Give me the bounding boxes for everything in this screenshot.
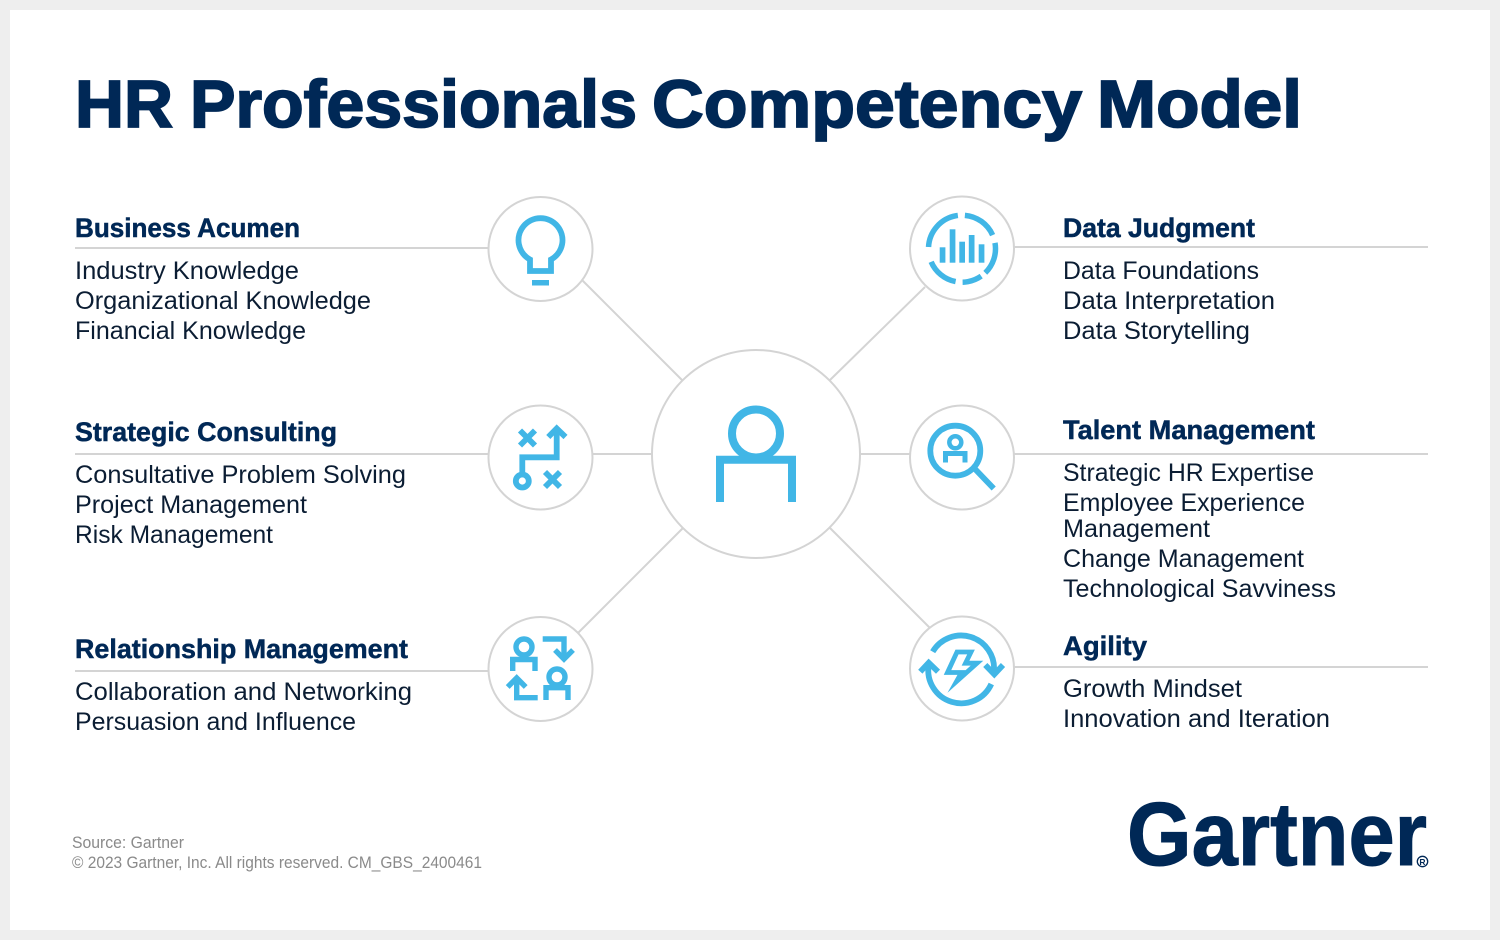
- list: strategic consulting skills: Project Management: [75, 491, 307, 519]
- source note: © 2023 Gartner, Inc. All rights reserved. CM_GBS_2400461: [72, 854, 482, 872]
- list: agility skills: [1063, 675, 1330, 733]
- panel: data judgment: [1063, 213, 1275, 345]
- list: relationship management skills: Collaboration and Networking: [75, 678, 412, 706]
- logo: Gartner: Gartner: [1127, 785, 1427, 885]
- source note: [72, 834, 482, 872]
- list: talent management skills: Strategic HR Expertise: [1063, 459, 1314, 487]
- heading: agility: Agility: [1063, 631, 1147, 661]
- list: talent management skills: Employee Experience: [1063, 489, 1305, 517]
- list: relationship management skills: Persuasion and Influence: [75, 708, 356, 736]
- icon: relationship exchange: [488, 617, 592, 721]
- list: relationship management skills: [75, 678, 412, 736]
- heading: relationship management: Relationship Management: [75, 634, 408, 664]
- icon: agility cycle: [910, 616, 1014, 720]
- list: data judgment skills: [1063, 257, 1275, 345]
- icon: strategy path: [488, 406, 592, 510]
- list: business acumen skills: Industry Knowledge: [75, 257, 299, 285]
- list: talent management skills: Change Management: [1063, 545, 1304, 573]
- heading: strategic consulting: Strategic Consulting: [75, 417, 337, 447]
- list: strategic consulting skills: Consultative Problem Solving: [75, 461, 406, 489]
- panel: talent management: [1063, 415, 1336, 603]
- icon: central person: [652, 350, 860, 558]
- title: Competency: [652, 67, 1082, 142]
- list: business acumen skills: Financial Knowledge: [75, 317, 306, 345]
- heading: business acumen: Business Acumen: [75, 213, 300, 243]
- heading: data judgment: Data Judgment: [1063, 213, 1255, 243]
- icon: light bulb: [488, 197, 592, 301]
- list: data judgment skills: Data Interpretation: [1063, 287, 1275, 315]
- list: data judgment skills: Data Storytelling: [1063, 317, 1250, 345]
- heading: talent management: Talent Management: [1063, 415, 1315, 445]
- list: business acumen skills: [75, 257, 371, 345]
- list: talent management skills: [1063, 459, 1336, 603]
- list: strategic consulting skills: Risk Management: [75, 521, 273, 549]
- panel: strategic consulting: [75, 417, 406, 549]
- icon: data chart ring: [910, 196, 1014, 300]
- source note: Source: Gartner: [72, 834, 184, 852]
- logo: Gartner: R: [1419, 857, 1426, 867]
- list: data judgment skills: Data Foundations: [1063, 257, 1259, 285]
- list: talent management skills: Technological Savviness: [1063, 575, 1336, 603]
- title: HR: [75, 67, 173, 142]
- title: Model: [1097, 67, 1302, 142]
- panel: agility: [1063, 631, 1330, 733]
- title: [75, 67, 1302, 142]
- icon: talent magnifier: [910, 406, 1014, 510]
- list: agility skills: Innovation and Iteration: [1063, 705, 1330, 733]
- panel: relationship management: [75, 634, 412, 736]
- connector lines: [75, 247, 1428, 671]
- list: agility skills: Growth Mindset: [1063, 675, 1242, 703]
- title: Professionals: [190, 67, 637, 142]
- list: strategic consulting skills: [75, 461, 406, 549]
- list: talent management skills: Management: [1063, 515, 1210, 543]
- panel: business acumen: [75, 213, 371, 345]
- list: business acumen skills: Organizational Knowledge: [75, 287, 371, 315]
